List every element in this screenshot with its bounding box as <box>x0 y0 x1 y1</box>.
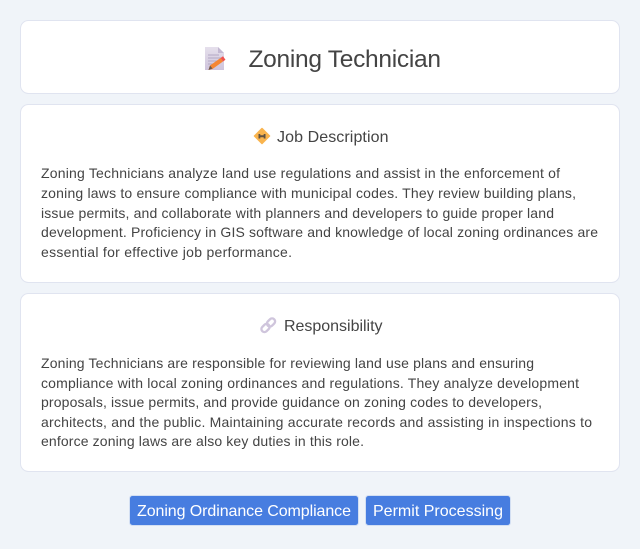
text block: job description: issue permits, and collaborate with planners and developers to guide proper land <box>41 205 554 221</box>
icon: chain link <box>260 317 276 333</box>
text block: job description: Zoning Technicians analyze land use regulations and assist in the enforcement of <box>41 165 560 181</box>
tag: permit processing <box>366 496 510 526</box>
text block: job description: zoning laws to ensure compliance with municipal codes. They review building plans, <box>41 185 576 201</box>
panel: job description <box>20 104 620 282</box>
tag: zoning ordinance compliance <box>130 496 358 526</box>
heading: job description: Job Description <box>277 129 388 146</box>
title: Zoning Technician <box>248 46 441 73</box>
text block: responsibility <box>41 355 592 449</box>
panel: responsibility <box>20 294 620 472</box>
text block: responsibility: compliance with local zoning ordinances and regulations. They analyze development <box>41 375 579 391</box>
heading: responsibility: Responsibility <box>284 318 382 335</box>
text block: job description: essential for effective job performance. <box>41 244 292 260</box>
tag: zoning ordinance compliance: Zoning Ordinance Compliance <box>137 503 351 520</box>
text block: job description <box>41 165 598 260</box>
tag: permit processing: Permit Processing <box>373 503 503 520</box>
text block: responsibility: enforce zoning laws are also key duties in this role. <box>41 433 364 449</box>
panel: title header <box>20 20 620 94</box>
icon: memo with pencil <box>205 47 226 70</box>
text block: job description: development. Proficiency in GIS software and knowledge of local zoning ordinances are <box>41 224 598 240</box>
text block: responsibility: Zoning Technicians are responsible for reviewing land use plans and ensuring <box>41 355 534 371</box>
icon: orange diamond sign <box>254 128 270 144</box>
text block: responsibility: proposals, issue permits, and provide guidance on zoning codes to developers, <box>41 394 542 410</box>
text block: responsibility: architects, and the public. Maintaining accurate records and assisting in inspections to <box>41 414 592 430</box>
